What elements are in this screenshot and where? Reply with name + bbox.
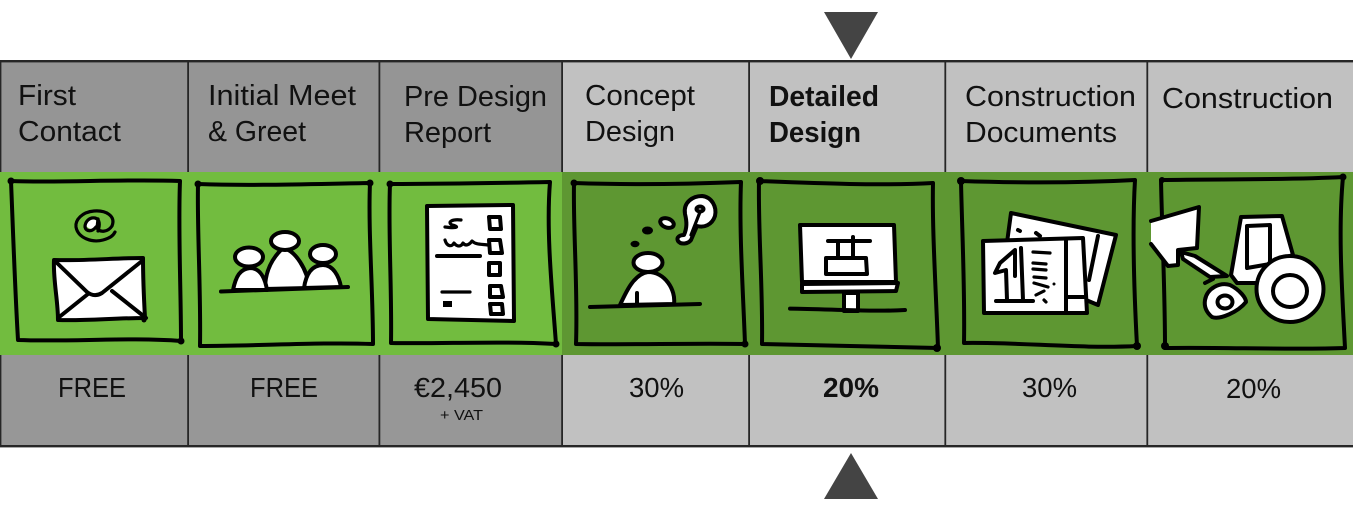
fee: Initial Meet free: FREE (250, 372, 318, 403)
icon: three people (194, 180, 374, 346)
heading: Concept Design (585, 80, 695, 148)
heading: Detailed Design: Design (769, 117, 861, 149)
heading: First Contact: First (18, 80, 76, 112)
icon: drawing on a computer screen (756, 177, 941, 352)
marker: top arrow (824, 12, 878, 59)
heading: Pre Design Report: Report (404, 117, 491, 149)
heading: Detailed Design (769, 81, 879, 149)
icon: construction document set (957, 177, 1141, 350)
heading: Initial Meet and Greet: & Greet (208, 116, 306, 148)
fee: Concept Design share: 30% (629, 372, 684, 403)
green icon band (0, 172, 1353, 355)
heading: Pre Design Report (404, 81, 547, 149)
fee: First Contact free: FREE (58, 372, 126, 403)
fee row backgrounds (0, 354, 1353, 446)
icon: person thinking of a light bulb (570, 180, 748, 348)
marker: bottom arrow (824, 453, 878, 499)
heading: Construction Documents: Documents (965, 117, 1117, 149)
heading: Initial Meet and Greet (208, 80, 356, 148)
heading: Construction Documents: Construction (965, 81, 1136, 113)
icon: email envelope (8, 178, 184, 344)
heading: Initial Meet and Greet: Initial Meet (208, 80, 356, 112)
heading: Construction: Construction (1162, 83, 1333, 115)
fee: Construction share: 20% (1226, 373, 1281, 404)
heading: Concept Design: Design (585, 116, 675, 148)
icon: tractor with loader bucket (1151, 174, 1346, 350)
header row backgrounds (0, 60, 1353, 173)
stage table (0, 60, 1353, 447)
heading: First Contact: Contact (18, 116, 121, 148)
heading: Pre Design Report: Pre Design (404, 81, 547, 113)
fee: Pre Design Report price: €2,450 (414, 372, 502, 403)
fee: Pre Design Report price (414, 372, 502, 424)
heading: Concept Design: Concept (585, 80, 695, 112)
fee: Construction Documents share: 30% (1022, 372, 1077, 403)
fee: Detailed Design share: 20% (823, 372, 879, 403)
heading: Construction Documents (965, 81, 1136, 149)
heading: First Contact (18, 80, 121, 148)
icon: report document (386, 180, 560, 348)
heading: Detailed Design: Detailed (769, 81, 879, 113)
fee: Pre Design Report price: + VAT (440, 407, 483, 424)
